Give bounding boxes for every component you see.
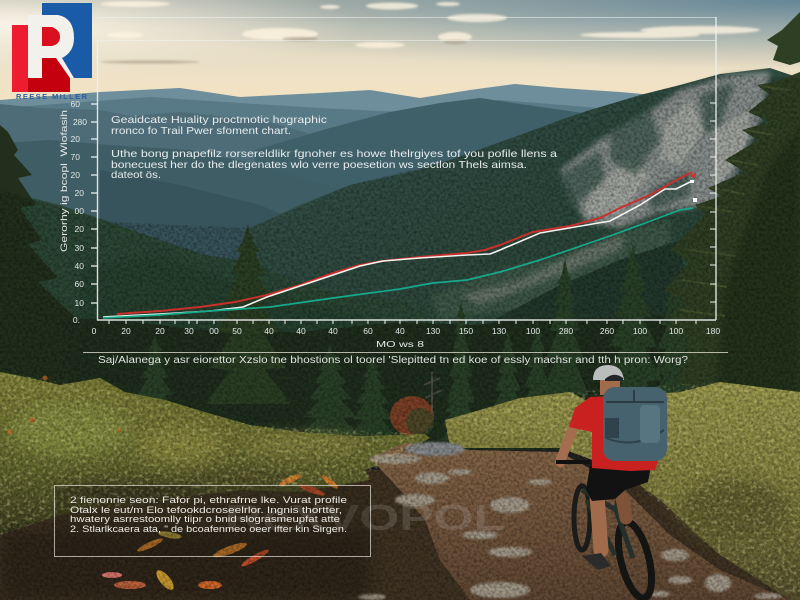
watermark: ReXVOPOL <box>225 497 505 538</box>
chart: y-axis numbers: 280 <box>73 117 87 127</box>
callout: notes panel <box>54 486 370 556</box>
chart: x-axis title: MO ws 8 <box>376 339 424 349</box>
caption text under chart: Saj/Alanega y asr eiorettor Xzslo tne bhostions ol toorel 'Slepitted tn ed koe of essly machsr and tth h pron: Worg? <box>98 355 689 366</box>
chart: y-axis numbers: 20 <box>75 224 84 234</box>
chart: y-axis numbers: 10 <box>75 298 84 308</box>
chart: introductory description text: rronco fo Trail Pwer sfoment chart. <box>111 125 291 137</box>
chart: x-axis numbers <box>92 326 720 336</box>
chart: y-axis numbers: 0. <box>73 315 80 325</box>
background: dark forested hill on left <box>0 190 460 400</box>
caption rule <box>83 352 728 354</box>
chart: red power line <box>117 172 696 314</box>
chart: x-axis numbers: 100 <box>669 326 683 336</box>
foreground: autumn leaves at lower left <box>0 472 370 600</box>
foreground: left flowering shrubs <box>0 372 430 535</box>
cyclist riding away on mountain bike <box>556 365 667 600</box>
chart: x-axis numbers: 40 <box>296 326 306 336</box>
chart: y-axis numbers: 20 <box>71 134 80 144</box>
tree: central fir <box>205 224 291 404</box>
chart: x-axis numbers: 50 <box>232 326 242 336</box>
chart: introductory description text: Geaidcate Huality proctmotic hographic <box>111 114 327 126</box>
red L base and R leg <box>28 58 70 92</box>
far leg <box>622 498 626 518</box>
chart: y-axis numbers: 20 <box>71 170 80 180</box>
chart: x-axis numbers: 100 <box>633 326 647 336</box>
chart: x-axis numbers: 150 <box>459 326 473 336</box>
chart: x-axis numbers: 40 <box>328 326 338 336</box>
near leg <box>597 495 601 550</box>
chart: y-axis numbers: 60 <box>71 99 80 109</box>
chart: x-axis numbers: 0 <box>92 326 97 336</box>
bike frame <box>582 488 633 558</box>
shoe <box>582 553 611 570</box>
logo: Reese Miller R mark <box>12 3 92 101</box>
chart: y-axis numbers: 30 <box>75 243 84 253</box>
chart: x-axis numbers: 130 <box>426 326 440 336</box>
chart: y-axis numbers: 40 <box>75 261 84 271</box>
chart: rotated y-axis title: Gerorhy ig bcopl Wlofasih <box>59 110 70 252</box>
foreground: right shrubs <box>445 382 800 600</box>
background: forested slope and rocky mountain face <box>250 68 800 400</box>
logo name: REESE MILLER <box>16 92 88 101</box>
chart: x-axis numbers: 30 <box>184 326 194 336</box>
chart: introductory description text: bonecuest her do the dlegenates wlo verre poesetion ws sectlon Thels aimsa. <box>111 159 527 171</box>
callout: notes panel: 2 fienonrie seon: Fafor pi, ethrafrne lke. Vurat profile <box>70 495 347 506</box>
callout: notes panel: hwatery asrrestoomlly tiipr o bnid slograsmeupfat atte <box>70 514 340 525</box>
chart: x-axis numbers: 40 <box>264 326 274 336</box>
chart: introductory description text: dateot ös. <box>111 169 161 181</box>
chart: y-axis numbers <box>71 99 87 325</box>
chart: frame and axes <box>91 17 716 324</box>
front wheel <box>574 486 590 550</box>
red shirt <box>569 395 665 471</box>
texture: lit leaves on shrubs <box>0 370 800 600</box>
chart: x-axis numbers: 180 <box>706 326 720 336</box>
chart: y-axis numbers: 60 <box>75 279 84 289</box>
chart: x-axis numbers: 280 <box>559 326 573 336</box>
chart: white power line <box>103 180 697 317</box>
rear wheel <box>612 519 658 600</box>
tree: left foreground fir <box>0 125 86 400</box>
chart: x-axis numbers: 100 <box>526 326 540 336</box>
background: ground and undergrowth <box>0 470 800 600</box>
white R letterform <box>28 15 74 92</box>
chart: teal power line <box>103 208 693 318</box>
background: distant blue mountain ridges <box>0 80 800 320</box>
chart: x-axis numbers: 00 <box>209 326 219 336</box>
red L stem <box>12 25 28 92</box>
chart: y-axis numbers: 20 <box>75 188 84 198</box>
callout: notes panel: 2. Stlarlkcaera ata, " de bcoafenmeo oeer ifter kin Sirgen. <box>70 524 347 535</box>
chart: x-axis numbers: 20 <box>121 326 131 336</box>
chart: x-axis numbers: 40 <box>395 326 405 336</box>
callout: notes panel: Otalx le eut/m Elo tefookdcroseelrlor. Ingnis thortter, <box>70 505 342 516</box>
tree: right foreground large fir <box>665 12 800 400</box>
trail: rocky dirt path <box>358 442 790 600</box>
chart: x-axis numbers: 130 <box>492 326 506 336</box>
handlebar <box>556 460 590 464</box>
red R counter <box>42 27 60 46</box>
chart: x-axis numbers: 20 <box>155 326 165 336</box>
chart: y-axis numbers: 00 <box>75 206 84 216</box>
cap <box>593 365 624 381</box>
chart: x-axis numbers: 260 <box>600 326 614 336</box>
background: sunset sky <box>0 0 800 125</box>
chart: x-axis numbers: 60 <box>363 326 373 336</box>
chart: y-axis numbers: 70 <box>71 152 80 162</box>
shorts <box>586 466 651 501</box>
arm <box>560 428 573 462</box>
background: dark conifer forest band <box>0 244 800 450</box>
neck <box>600 379 620 395</box>
backpack <box>603 387 667 461</box>
chart: introductory description text: Uthe bong pnapefilz rorsereldlikr fgnoher es howe thelrgiyes tof you pofile llens a <box>111 148 557 160</box>
chart: introductory description text <box>111 114 557 181</box>
